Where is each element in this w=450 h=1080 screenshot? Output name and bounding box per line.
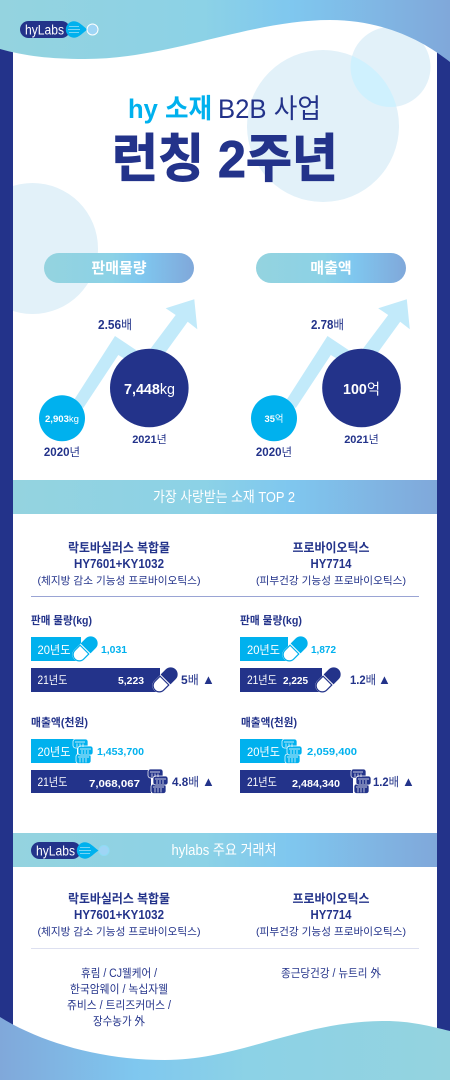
chart: sales volume left: 판매 물량(kg) [31, 613, 92, 627]
bar 2021: ▲ [202, 774, 215, 789]
client heading left: HY7601+KY1032 [74, 908, 164, 922]
client list left: 한국암웨이 / 녹십자웰 [70, 983, 168, 996]
title: 런칭 2주년 [112, 131, 338, 189]
year labels [44, 433, 167, 459]
bottom wave footer [0, 1017, 450, 1080]
bar 2021: 1.2배 [350, 673, 376, 687]
year labels [256, 433, 379, 459]
client list left: 쥬비스 / 트리즈커머스 / [67, 999, 172, 1012]
bar 2021: ▲ [402, 774, 415, 789]
heading pill: revenue: 매출액 [310, 260, 352, 277]
bar 2021 [31, 769, 215, 794]
bar 2021: 21년도 [38, 776, 68, 789]
bar 2020 [240, 633, 336, 665]
arrow: growth [286, 299, 410, 408]
bar 2021: 21년도 [247, 674, 277, 687]
title: B2B 사업 [218, 94, 321, 124]
heading pill: sales volume: 판매물량 [91, 260, 147, 277]
chart: sales volume right: 판매 물량(kg) [240, 613, 302, 627]
bar 2021: ▲ [202, 672, 215, 687]
chart: sales volume right [240, 613, 391, 696]
bar 2021 [240, 664, 391, 696]
ingredient heading left [38, 540, 200, 587]
panel: sales volume [39, 253, 197, 459]
section banner: top 2 [13, 480, 437, 514]
background circles [0, 27, 430, 314]
client heading left [38, 891, 200, 938]
circle 2021: 100억 [343, 381, 380, 398]
bar 2021: 5배 [181, 673, 199, 687]
bar 2020 [240, 739, 357, 764]
top wave header [0, 0, 450, 62]
year labels: 2020년 [44, 446, 80, 459]
ingredient heading left: 락토바실러스 복합물 [68, 540, 170, 555]
ingredient heading left: HY7601+KY1032 [74, 557, 164, 571]
circle 2020: 35억 [264, 413, 284, 425]
bar 2020: 20년도 [38, 745, 70, 759]
panel: revenue [251, 253, 410, 459]
bar 2021: 2,225 [283, 675, 308, 687]
client list left [67, 967, 172, 1028]
multiplier label: 2.56배 [98, 318, 132, 332]
circle 2021 [322, 349, 401, 427]
bar 2020: 20년도 [247, 745, 280, 759]
client heading right: (피부건강 기능성 프로바이오틱스) [256, 926, 406, 938]
heading pill: revenue [256, 253, 406, 283]
bar 2021: 1.2배 [373, 775, 399, 789]
section banner: clients: hylabs 주요 거래처 [172, 842, 276, 859]
logo: hyLabs top [20, 21, 98, 38]
bar 2021 [31, 664, 215, 696]
section banner: top 2: 가장 사랑받는 소재 TOP 2 [153, 489, 295, 506]
client list left: 장수농가 外 [93, 1015, 145, 1028]
arrow: growth [74, 299, 197, 408]
client heading right: HY7714 [310, 908, 352, 922]
bar 2020 [31, 739, 144, 764]
title: hy 소재 [128, 94, 212, 124]
logo: hyLabs banner [31, 842, 109, 859]
bar 2020: 1,031 [101, 644, 127, 656]
logo: hyLabs top: hyLabs [25, 22, 64, 38]
circle 2020 [251, 395, 297, 441]
circle 2020 [39, 395, 85, 441]
client heading right: 프로바이오틱스 [292, 892, 370, 906]
ingredient heading right: (피부건강 기능성 프로바이오틱스) [256, 575, 406, 587]
section banner: clients [13, 833, 437, 867]
multiplier label: 2.78배 [311, 318, 344, 332]
chart: sales volume left [31, 613, 215, 696]
bar 2021: 21년도 [247, 776, 277, 789]
year labels: 2021년 [344, 433, 379, 446]
circle 2020: 2,903kg [45, 414, 79, 424]
bar 2020: 1,872 [311, 644, 336, 656]
circle 2021 [110, 349, 189, 427]
logo: hyLabs banner: hyLabs [36, 844, 75, 858]
ingredient heading right: HY7714 [310, 557, 352, 571]
chart: revenue left: 매출액(천원) [31, 715, 88, 729]
client heading right [256, 892, 406, 938]
chart: revenue left [31, 715, 215, 794]
client list right: 종근당건강 / 뉴트리 外 [281, 967, 381, 980]
client list left: 휴림 / CJ웰케어 / [81, 967, 158, 980]
year labels: 2020년 [256, 446, 292, 459]
bar 2020: 20년도 [38, 643, 70, 657]
circle 2021: 7,448kg [124, 381, 175, 398]
bar 2021: 5,223 [118, 675, 144, 687]
bar 2021: 2,484,340 [292, 778, 340, 790]
ingredient heading left: (체지방 감소 기능성 프로바이오틱스) [38, 575, 200, 587]
bar 2021: ▲ [378, 672, 391, 687]
title [112, 94, 338, 189]
heading pill: sales volume [44, 253, 194, 283]
bar 2020: 20년도 [247, 643, 280, 657]
bar 2021: 21년도 [38, 674, 68, 687]
ingredient heading right: 프로바이오틱스 [292, 541, 370, 555]
client heading left: 락토바실러스 복합물 [68, 891, 170, 906]
year labels: 2021년 [132, 433, 167, 446]
bar 2020: 2,059,400 [307, 746, 357, 758]
bar 2021: 7,068,067 [89, 778, 140, 790]
client heading left: (체지방 감소 기능성 프로바이오틱스) [38, 926, 200, 938]
bar 2020 [31, 633, 127, 665]
ingredient heading right [256, 541, 406, 587]
bar 2021: 4.8배 [172, 775, 199, 789]
bar 2021 [240, 769, 415, 794]
bar 2020: 1,453,700 [97, 746, 144, 758]
chart: revenue right [240, 715, 415, 794]
chart: revenue right: 매출액(천원) [241, 715, 297, 729]
